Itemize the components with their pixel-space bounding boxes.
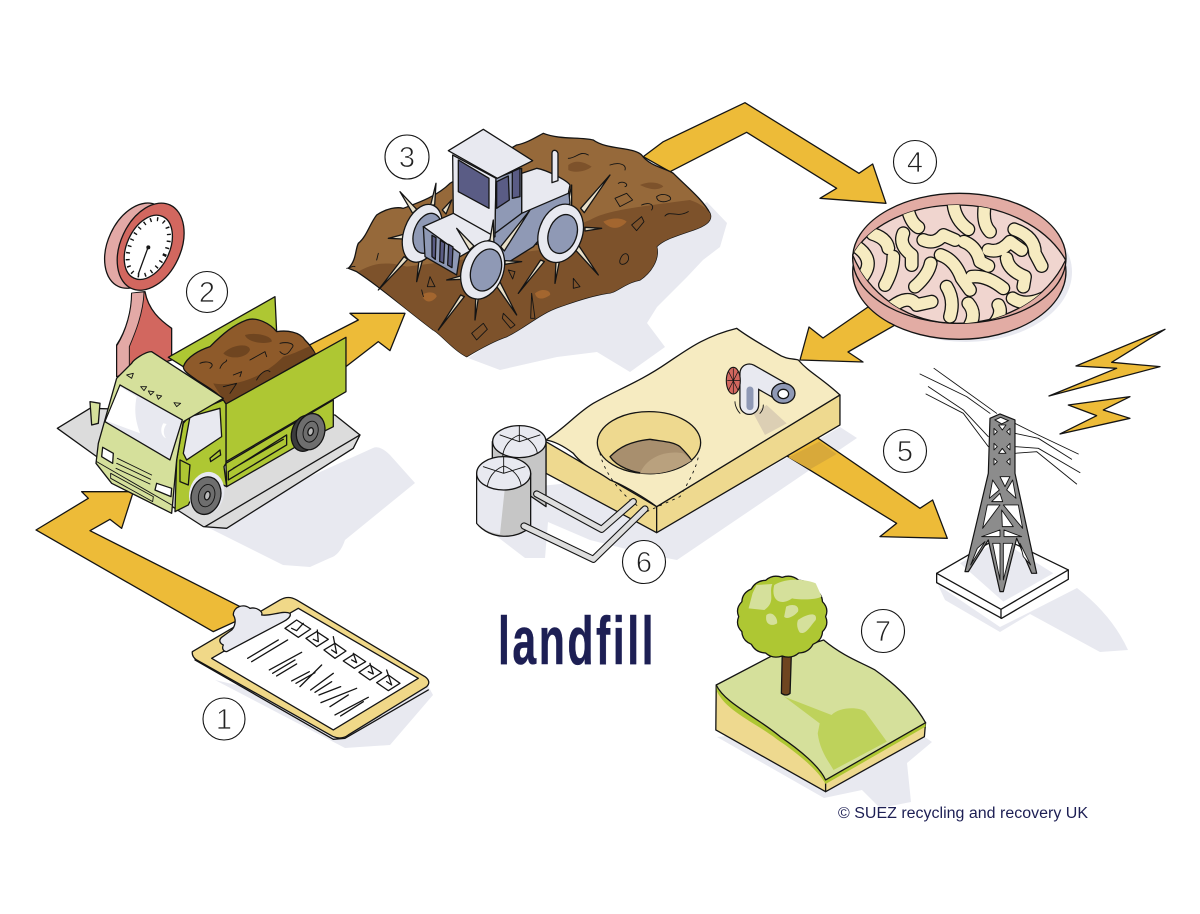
item 5: electricity pylon (920, 329, 1165, 618)
item 7: restored ground and tree (716, 576, 926, 792)
step number 7: 7 (875, 616, 891, 648)
step number 1 (203, 698, 245, 740)
shadow: truck (203, 447, 415, 567)
compactor near wheels and spikes (438, 198, 591, 330)
shadow: landfill cell (495, 427, 857, 560)
step number 4 (894, 140, 936, 184)
soil heap (347, 133, 711, 357)
tree trunk (781, 657, 791, 695)
title: landfill (498, 603, 656, 679)
shadow: soil heap (468, 202, 727, 372)
arrow: soil to bacteria (643, 103, 886, 203)
arrow: cell to electricity (780, 435, 947, 538)
step number 6 (622, 540, 666, 584)
truck cab (90, 352, 227, 513)
step number 5: 5 (897, 436, 913, 468)
truck front wheel (184, 468, 229, 519)
wires (920, 368, 1080, 484)
step number 7 (862, 610, 904, 652)
pylon lattice (965, 414, 1037, 592)
grass edge (716, 685, 926, 784)
excavated hole (597, 412, 701, 512)
truck back panel (168, 297, 315, 403)
weighing platform (57, 408, 360, 528)
pipe shadow (753, 405, 787, 435)
shadow: clipboard (215, 680, 433, 748)
weighing dial (92, 192, 197, 377)
clip (220, 606, 290, 652)
item 3: waste heap and compactor (347, 129, 711, 357)
dish surface (853, 205, 1066, 323)
ground side right (826, 723, 926, 792)
step number 3: 3 (399, 142, 415, 174)
truck chassis (226, 400, 333, 487)
paper (212, 608, 418, 730)
arrow: bacteria to landfill cell (800, 307, 895, 362)
step number 5 (884, 430, 926, 472)
gas tanks (477, 426, 546, 536)
arrow: clipboard to truck (36, 492, 253, 632)
truck load of waste (183, 319, 315, 404)
step number 2 (186, 272, 228, 312)
item 4: petri dish with bacteria (853, 193, 1066, 339)
step number 6: 6 (636, 547, 652, 579)
step number 2: 2 (199, 277, 215, 309)
step number 1: 1 (216, 704, 232, 736)
ground side left (716, 685, 826, 792)
item 6: landfill cell with gas tanks (477, 328, 840, 559)
copyright: © SUEZ recycling and recovery UK (838, 805, 1089, 822)
compactor far wheel and spikes (378, 175, 610, 293)
compactor cab and body (423, 129, 570, 275)
item 2: weighbridge scale and truck (57, 192, 360, 528)
gas well pipe and valve (726, 367, 795, 413)
truck rear wheel (287, 410, 329, 454)
step number 3 (385, 135, 429, 179)
tree shadow (784, 697, 887, 770)
pylon base (937, 537, 1068, 618)
step number 4: 4 (907, 147, 923, 179)
text lines (248, 640, 368, 716)
item 1: clipboard checklist (192, 597, 429, 739)
grass top (716, 640, 926, 780)
tree canopy (737, 576, 827, 657)
gas pipes (524, 494, 645, 559)
shadow: ground block (717, 720, 932, 808)
shadow: tower (938, 585, 1128, 652)
lightning bolts (1049, 329, 1165, 434)
arrow: truck to compactor (287, 313, 405, 387)
dish rim (853, 193, 1066, 339)
truck cargo side panel (226, 337, 346, 462)
bacteria worms (857, 203, 1043, 325)
shadow: petri dish (860, 202, 1072, 342)
cell block (546, 328, 840, 533)
landfill process infographic (35, 102, 1166, 822)
board (192, 597, 429, 739)
checkboxes (285, 620, 400, 691)
